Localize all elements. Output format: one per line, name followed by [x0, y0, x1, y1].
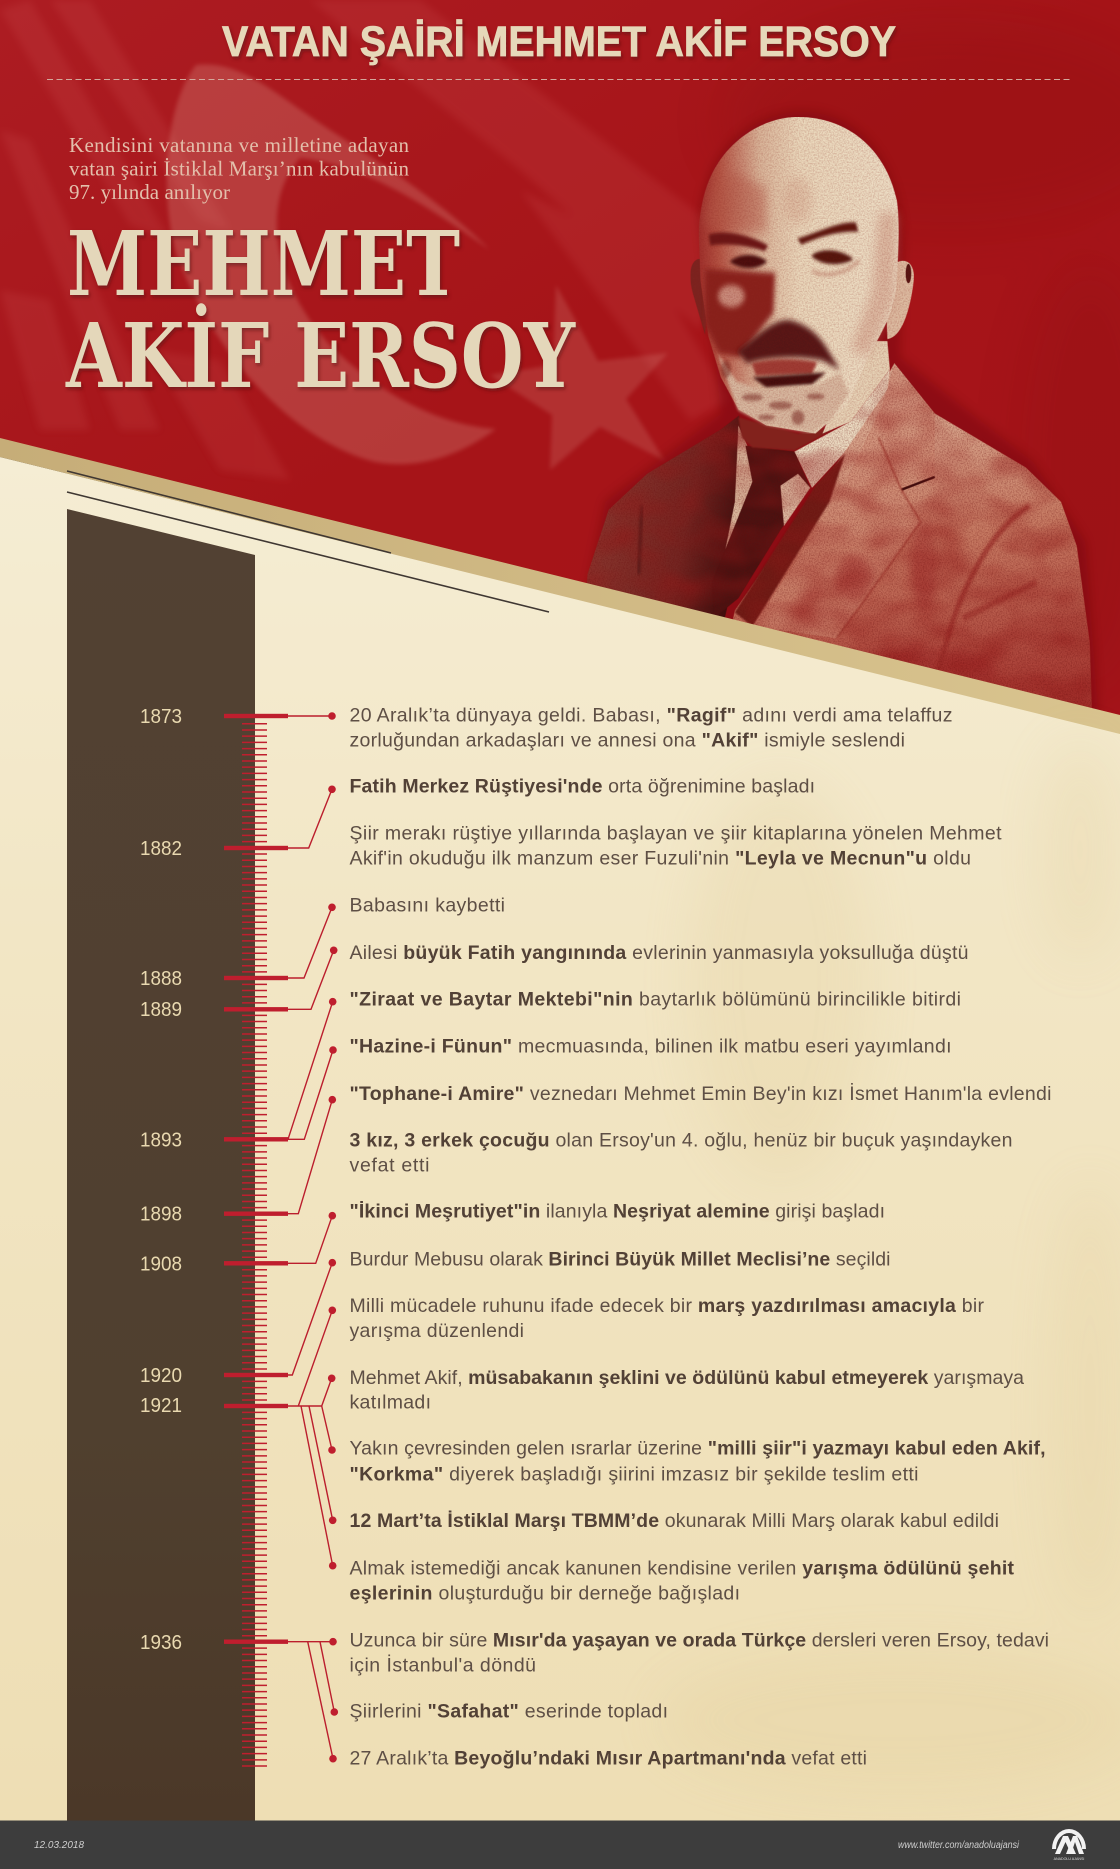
- year labels: 1898: [140, 1202, 182, 1226]
- head group: [690, 117, 914, 433]
- right eye: [811, 250, 853, 264]
- entry: school graduation: "Ziraat ve Baytar Mektebi"nin baytarlık bölümünü birincilikle bitirdi: [350, 988, 961, 1010]
- entry: first publication: "Hazine-i Fünun" mecmuasında, bilinen ilk matbu eseri yayımlandı: [350, 1036, 952, 1058]
- icon: Anadolu Agency logo: ANADOLU AJANSI: [1054, 1857, 1084, 1861]
- footer date: 12.03.2018: [34, 1840, 84, 1851]
- entry: poetry interest: Şiir merakı rüştiye yıllarında başlayan ve şiir kitaplarına yönelen Mehmet: [350, 822, 1002, 844]
- entry: anthem: 12 Mart’ta İstiklal Marşı TBMM’de okunarak Milli Marş olarak kabul edildi: [350, 1509, 999, 1532]
- year labels: 1936: [140, 1631, 182, 1654]
- entry: poetry interest: [350, 822, 1002, 870]
- flag folds: [0, 0, 730, 480]
- year labels: 1882: [140, 837, 182, 860]
- dark vignette: [772, 106, 776, 108]
- entry: poetry interest: Akif'in okuduğu ilk manzum eser Fuzuli'nin "Leyla ve Mecnun"u oldu: [350, 848, 971, 870]
- entry: publishing: "İkinci Meşrutiyet"in ilanıyla Neşriyat alemine girişi başladı: [350, 1200, 885, 1222]
- lapel: [752, 365, 935, 638]
- forehead centre mottling: [784, 176, 812, 225]
- lapel dark edge: [735, 454, 845, 626]
- suit dark patches: [835, 522, 998, 695]
- entry: Egypt: için İstanbul'a döndü: [350, 1654, 536, 1676]
- mouth shadow: [752, 372, 826, 388]
- suit right side: [732, 363, 1092, 708]
- entry: fire: Ailesi büyük Fatih yangınında evlerinin yanmasıyla yoksulluğa düştü: [350, 942, 968, 964]
- year labels: 1921: [140, 1394, 182, 1417]
- left eyebrow: [709, 233, 768, 251]
- right eyebrow: [797, 222, 858, 245]
- entry: father: Babasını kaybetti: [350, 894, 505, 916]
- entry: birth: zorluğundan arkadaşları ve annesi ona "Akif" ismiyle seslendi: [350, 730, 905, 752]
- title divider: [47, 78, 1073, 80]
- under-eye right: [812, 261, 859, 274]
- entry: donation: [350, 1558, 1014, 1604]
- entry: children: [350, 1130, 1012, 1176]
- right ear: [886, 261, 914, 339]
- under chin shadow: [738, 417, 837, 450]
- beard speckle: [721, 360, 825, 425]
- entry: death: 27 Aralık’ta Beyoğlu’ndaki Mısır Apartmanı'nda vefat etti: [350, 1748, 867, 1770]
- entry: refusal: [350, 1367, 1024, 1414]
- entry: children: 3 kız, 3 erkek çocuğu olan Ersoy'un 4. oğlu, henüz bir buçuk yaşındayken: [350, 1130, 1012, 1152]
- timeline dark column: [67, 509, 255, 1821]
- diagonal decorative lines: [67, 471, 549, 612]
- coat seam: [638, 506, 642, 574]
- entry: contest: [350, 1295, 984, 1342]
- neck: [823, 341, 890, 433]
- lips: [752, 359, 817, 376]
- beard: [717, 353, 849, 433]
- coat left side: [586, 416, 741, 618]
- year labels: 1908: [140, 1252, 182, 1276]
- portrait halo: [581, 112, 1100, 730]
- year labels: [140, 705, 182, 1654]
- entry: donation: Almak istemediği ancak kanunen kendisine verilen yarışma ödülünü şehit: [350, 1558, 1014, 1580]
- timeline connectors and year markers: [224, 712, 338, 1763]
- entry: contest: Milli mücadele ruhunu ifade edecek bir marş yazdırılması amacıyla bir: [350, 1295, 984, 1317]
- left cheek highlight: [718, 285, 745, 307]
- main name heading: [65, 211, 576, 408]
- entry: refusal: katılmadı: [350, 1392, 431, 1414]
- flag star: [490, 285, 668, 470]
- timeline ruler ticks: [242, 723, 267, 1767]
- entry: marriage: "Tophane-i Amire" veznedarı Mehmet Emin Bey'in kızı İsmet Hanım'la evlendi: [350, 1082, 1052, 1105]
- entry: poem: [350, 1438, 1046, 1486]
- year labels: 1889: [140, 998, 182, 1021]
- moustache: [737, 320, 840, 370]
- title: VATAN ŞAİRİ MEHMET AKİF ERSOY: [222, 18, 896, 66]
- sleeve seam: [938, 506, 1029, 671]
- shirt ruffle: [780, 474, 810, 526]
- intro text: Kendisini vatanına ve milletine adayan: [69, 133, 410, 157]
- connector dots: [328, 712, 338, 1763]
- entry: Egypt: [350, 1630, 1049, 1676]
- flag crescent: [167, 64, 496, 464]
- year labels: 1888: [140, 967, 182, 990]
- left eye: [730, 255, 767, 268]
- entry: refusal: Mehmet Akif, müsabakanın şeklini ve ödülünü kabul etmeyerek yarışmaya: [350, 1367, 1024, 1389]
- red flag background: [0, 0, 1120, 730]
- entry: donation: eşlerinin oluşturduğu bir derneğe bağışladı: [350, 1582, 740, 1604]
- head: [699, 117, 899, 433]
- icon: Anadolu Agency logo: [1052, 1829, 1086, 1861]
- paper panel: [0, 438, 1120, 1825]
- entry: birth: [350, 704, 952, 752]
- entry: Safahat: Şiirlerini "Safahat" eserinde topladı: [350, 1700, 668, 1722]
- tie: [712, 446, 810, 618]
- connector lines: [288, 716, 334, 1759]
- footer link: www.twitter.com/anadoluajansi: [898, 1840, 1020, 1851]
- entry: parliament: Burdur Mebusu olarak Birinci Büyük Millet Meclisi’ne seçildi: [350, 1248, 890, 1270]
- forehead upper shadow: [703, 172, 766, 233]
- timeline text entries: [350, 704, 1052, 1770]
- entry: poem: "Korkma" diyerek başladığı şiirini imzasız bir şekilde teslim etti: [350, 1464, 918, 1486]
- tan band: [0, 438, 1120, 734]
- year labels: 1893: [140, 1128, 182, 1152]
- entry: birth: 20 Aralık’ta dünyaya geldi. Babası, "Ragif" adını verdi ama telaffuz: [350, 704, 952, 726]
- footer: [0, 1820, 1120, 1869]
- suit jacket group: [586, 363, 1093, 730]
- portrait of Mehmet Akif Ersoy: [581, 112, 1100, 730]
- entry: contest: yarışma düzenlendi: [350, 1320, 524, 1342]
- left ear: [690, 259, 710, 335]
- main name heading: MEHMET: [67, 211, 460, 316]
- collar right: [794, 369, 890, 488]
- intro text: vatan şairi İstiklal Marşı’nın kabulünün: [69, 156, 410, 180]
- entry: children: vefat etti: [350, 1154, 430, 1176]
- paper stains: [660, 740, 1120, 1790]
- right temple shade: [851, 213, 898, 357]
- year labels: 1873: [140, 705, 182, 728]
- year marks: [224, 714, 288, 1644]
- year labels: 1920: [140, 1364, 182, 1387]
- entry: school: Fatih Merkez Rüştiyesi'nde orta öğrenimine başladı: [350, 776, 815, 798]
- entry: Egypt: Uzunca bir süre Mısır'da yaşayan ve orada Türkçe dersleri veren Ersoy, tedavi: [350, 1630, 1049, 1652]
- intro text: [69, 133, 410, 204]
- shirt strip: [725, 426, 752, 549]
- left cheek shadow: [705, 269, 775, 357]
- intro text: 97. yılında anılıyor: [69, 180, 230, 204]
- entry: poem: Yakın çevresinden gelen ısrarlar üzerine "milli şiir"i yazmayı kabul eden Akif,: [350, 1438, 1046, 1460]
- main name heading: AKİF ERSOY: [65, 302, 576, 408]
